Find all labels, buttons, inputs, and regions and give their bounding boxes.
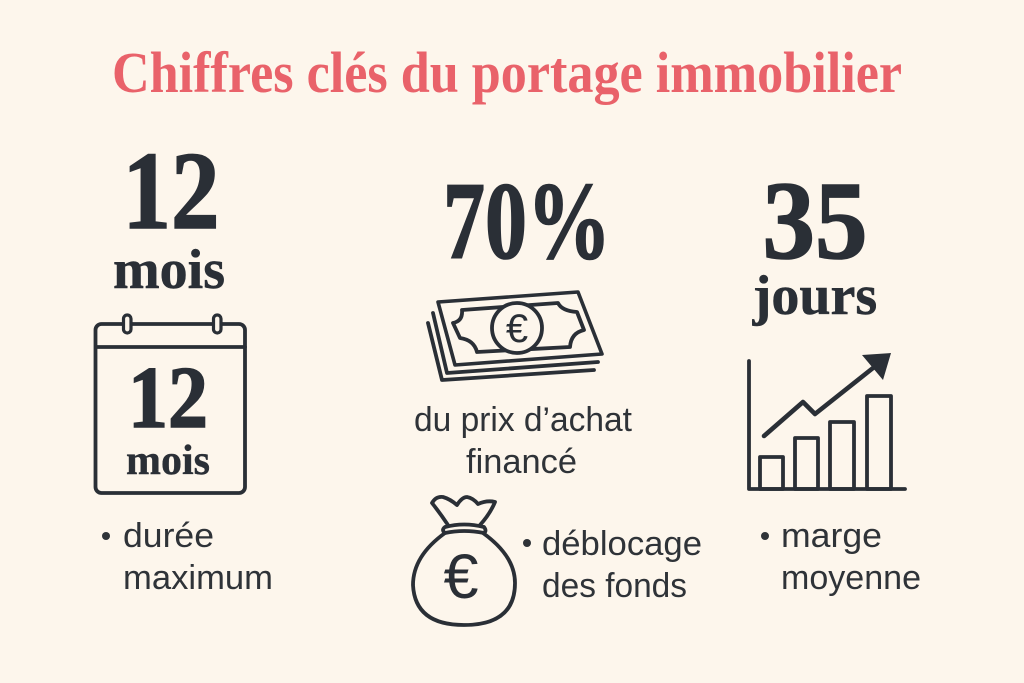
caption: du prix d'achat financé: du prix d’achat <box>414 401 633 439</box>
title: Chiffres clés du portage immobilier <box>112 40 902 105</box>
caption: durée maximum: durée <box>123 517 214 555</box>
caption: du prix d'achat financé <box>414 401 633 481</box>
icon: banknotes: € <box>506 307 528 351</box>
icon: banknotes <box>428 292 602 380</box>
icon: growth chart <box>749 353 905 489</box>
caption: marge moyenne: moyenne <box>781 559 921 597</box>
panel: 70% <box>413 160 702 625</box>
caption: déblocage des fonds: déblocage <box>542 525 702 563</box>
big number 70%: 70% <box>443 160 611 282</box>
caption: marge moyenne: marge <box>781 517 882 555</box>
unit jours: jours <box>752 265 877 327</box>
caption: durée maximum <box>102 517 273 597</box>
caption: déblocage des fonds <box>523 525 702 605</box>
icon: calendar: 12 <box>128 350 208 447</box>
icon: money bag <box>413 497 515 625</box>
big number 12: 12 <box>122 130 220 253</box>
caption: du prix d'achat financé: financé <box>466 443 577 481</box>
icon: calendar: mois <box>126 438 210 484</box>
unit mois: mois <box>113 239 225 301</box>
panel: 12 mois <box>96 130 273 597</box>
icon: money bag: € <box>443 542 479 612</box>
big number 35: 35 <box>762 160 868 283</box>
icon: calendar <box>96 315 245 493</box>
caption: déblocage des fonds: des fonds <box>542 567 687 605</box>
caption: durée maximum: maximum <box>123 559 273 597</box>
caption: marge moyenne <box>761 517 921 597</box>
panel: 35 jours <box>749 160 921 597</box>
